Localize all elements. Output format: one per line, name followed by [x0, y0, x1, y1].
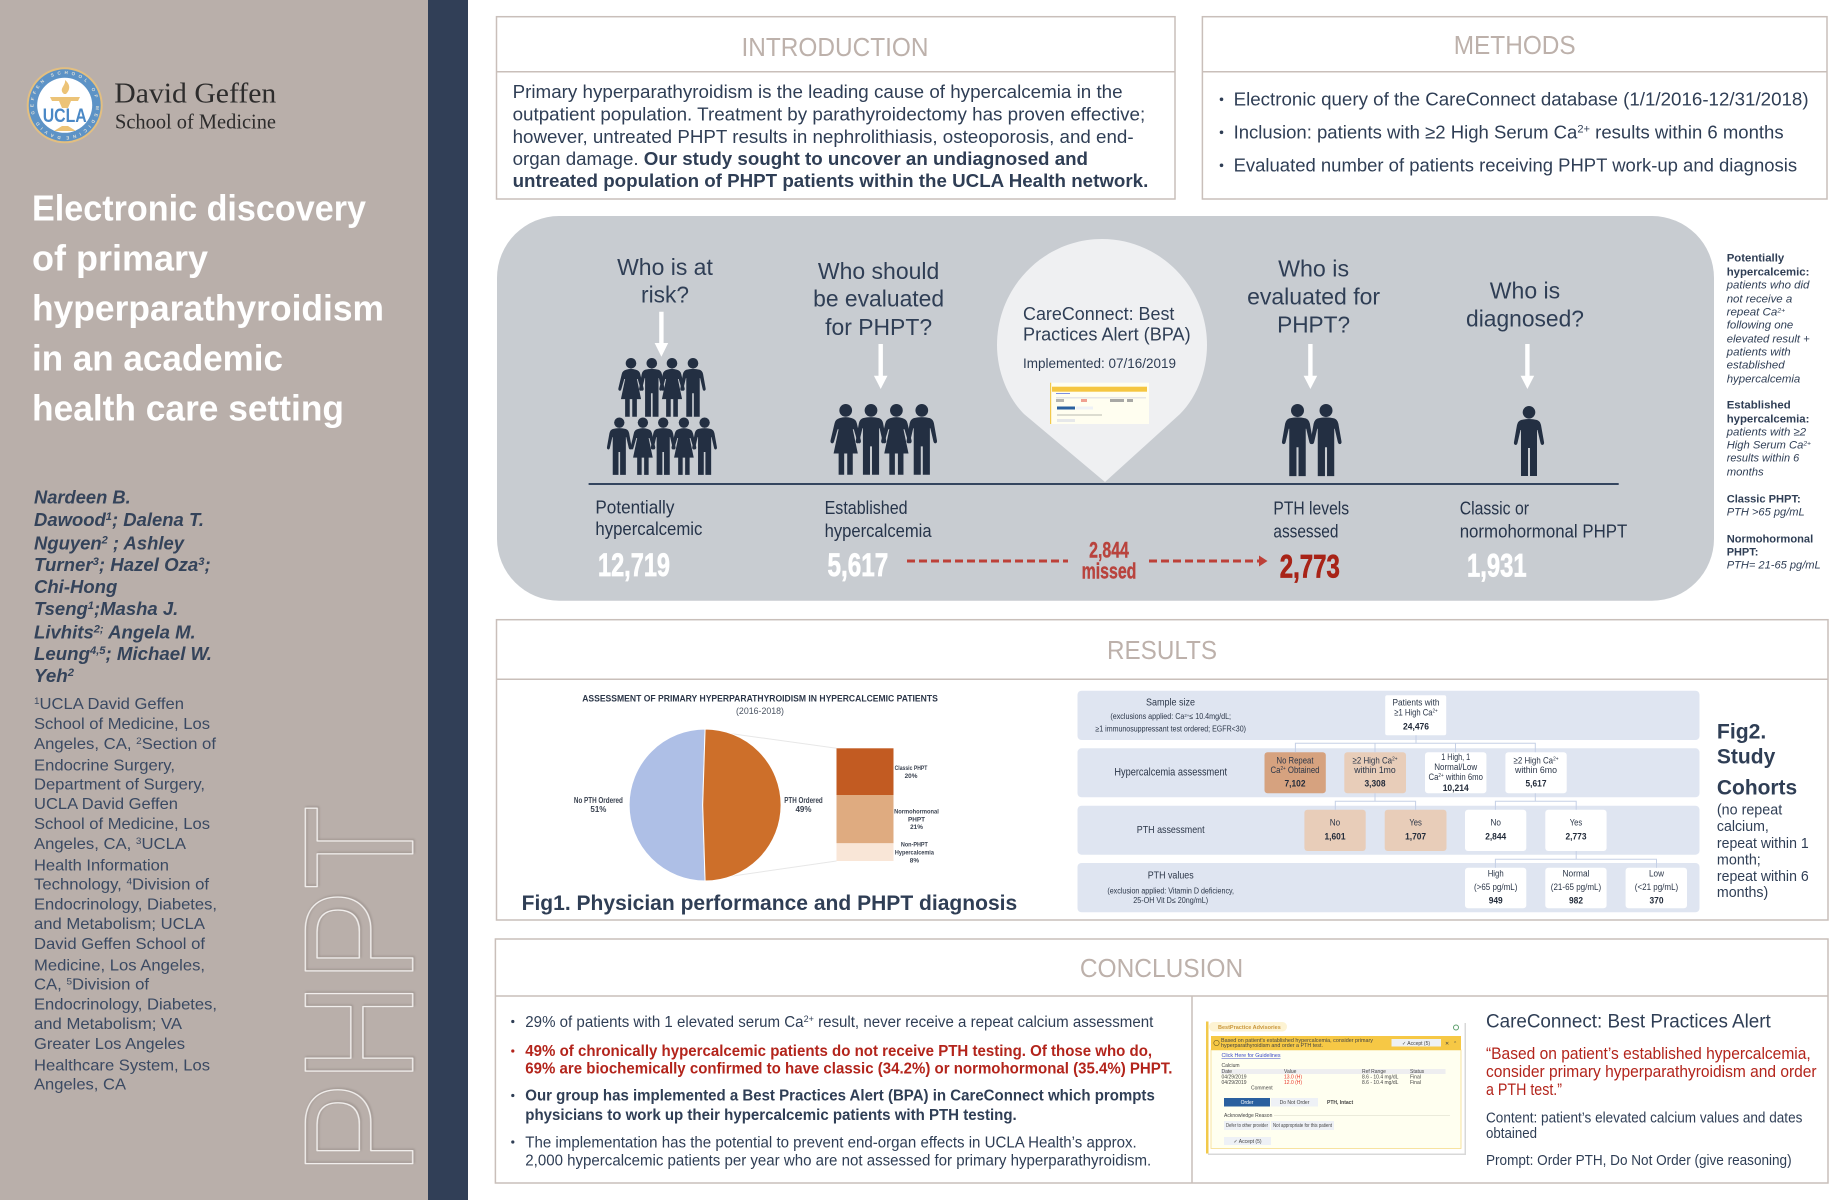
text block: definitions legend: PHPT:	[1727, 546, 1758, 558]
caption: figure 1: Fig1. Physician performance and PHPT diagnosis	[522, 892, 1017, 915]
heading: results: RESULTS	[1107, 635, 1217, 665]
title: health care setting	[32, 388, 344, 429]
text block: definitions legend: PTH= 21-65 pg/mL	[1727, 560, 1821, 572]
row: PTH assessment: No	[1490, 818, 1501, 829]
authors: Turner3; Hazel Oza 3;	[34, 555, 211, 575]
heading	[617, 254, 713, 308]
pie labels: PTH Ordered	[784, 796, 823, 805]
icon: BPA screenshot: BestPractice Advisories	[1218, 1025, 1281, 1031]
label: Established	[825, 498, 908, 518]
text block: definitions legend: hypercalcemia	[1727, 374, 1800, 386]
text block: definitions legend: following one	[1727, 320, 1793, 332]
arrow: missed patients dashed line	[907, 556, 1268, 566]
icon: BPA screenshot: Not appropriate for this patient	[1273, 1123, 1333, 1129]
row: sample size: Patients with	[1392, 698, 1440, 709]
text block: introduction body: Primary hyperparathyroidism is the leading cause of hypercalcemia in the	[513, 81, 1123, 102]
authors: Tseng1;Masha J.	[34, 599, 178, 619]
caption: figure 2: (no repeat	[1717, 802, 1783, 819]
row: sample size: Sample size	[1146, 696, 1195, 708]
pie labels: Classic PHPT	[895, 765, 927, 772]
arrow	[1304, 344, 1317, 389]
row: hypercalcemia assessment: ≥2 High Ca2+	[1514, 755, 1559, 766]
heading: be evaluated	[813, 286, 944, 312]
icon: UCLA seal: UCLA	[43, 106, 87, 127]
icon: BPA screenshot: Do Not Order	[1280, 1100, 1310, 1106]
row: PTH assessment: No	[1330, 818, 1340, 829]
row: hypercalcemia assessment: 5,617	[1526, 779, 1546, 790]
callout: CareConnect BPA pin: Practices Alert (BPA)	[1023, 325, 1191, 345]
icon: four people	[830, 404, 937, 475]
row: PTH assessment: 1,601	[1324, 832, 1346, 843]
row: PTH values: High	[1488, 869, 1504, 880]
text block: definitions legend: hypercalcemia:	[1727, 413, 1809, 425]
icon: BPA screenshot: Comment	[1251, 1086, 1273, 1092]
affiliations: Angeles, CA, 3UCLA	[34, 835, 186, 853]
row: PTH values	[1078, 863, 1700, 912]
sidebar background	[0, 0, 428, 1200]
row: hypercalcemia assessment: within 1mo	[1353, 765, 1396, 776]
pie labels: 8%	[910, 857, 919, 864]
row: sample size: (exclusions applied: Ca2+≤ 10.4mg/dL;	[1110, 712, 1231, 721]
pie labels: 49%	[795, 805, 812, 814]
authors: Livhits2; Angela M.	[34, 622, 196, 642]
text block: conclusion bullets	[511, 1014, 1173, 1169]
text block: methods bullets	[1220, 88, 1809, 175]
text block: conclusion bullets: 49% of chronically hypercalcemic patients do not receive PTH testing. Of those who do,	[525, 1043, 1152, 1060]
panel: results	[496, 620, 1828, 920]
row: hypercalcemia assessment: 10,214	[1443, 783, 1469, 794]
row: sample size: 24,476	[1403, 721, 1429, 732]
panel: patient funnel	[497, 216, 1714, 601]
text block: definitions legend: patients with ≥2	[1726, 427, 1807, 439]
heading: introduction: INTRODUCTION	[742, 32, 928, 62]
number: 12,719	[598, 547, 670, 583]
caption: figure 2: Study	[1717, 745, 1776, 768]
affiliations: Department of Surgery,	[34, 776, 205, 793]
caption: figure 2	[1717, 720, 1809, 901]
text block: CareConnect alert description: CareConnect: Best Practices Alert	[1486, 1012, 1772, 1033]
pie slice: no PTH ordered	[629, 729, 705, 881]
label: assessed	[1273, 521, 1338, 541]
row: PTH assessment: PTH assessment	[1137, 824, 1205, 836]
column: who is at risk	[595, 254, 717, 583]
icon: BPA screenshot: PTH, Intact	[1327, 1100, 1353, 1106]
text block: definitions legend: patients with	[1726, 347, 1791, 359]
row: sample size	[1078, 691, 1700, 740]
text block: definitions legend: repeat Ca2+	[1727, 306, 1785, 318]
icon: BPA screenshot: ✓ Accept (5)	[1233, 1139, 1262, 1145]
pie slice: PTH ordered	[703, 729, 781, 881]
icon: BPA screenshot: Order	[1241, 1100, 1254, 1106]
column: who is diagnosed	[1460, 277, 1627, 584]
title: of primary	[32, 238, 208, 279]
text block: definitions legend: months	[1727, 467, 1764, 479]
row: PTH assessment: 1,707	[1405, 832, 1426, 843]
text: 2,844 missed	[1082, 537, 1136, 584]
row: sample size: ≥1 immunosuppressant test ordered; EGFR<30)	[1095, 725, 1246, 734]
number: 1,931	[1467, 548, 1527, 584]
row: hypercalcemia assessment	[1078, 748, 1700, 797]
affiliations: School of Medicine, Los	[34, 816, 210, 833]
icon: BPA screenshot: hyperparathyroidism and order a PTH test.	[1221, 1043, 1323, 1049]
title: Electronic discovery	[32, 188, 366, 229]
logo wordmark: David Geffen	[114, 78, 277, 110]
authors: Leung4,5; Michael W.	[34, 644, 212, 664]
row: PTH values: PTH values	[1148, 870, 1194, 882]
chart title	[582, 694, 938, 717]
row: hypercalcemia assessment: No Repeat	[1276, 755, 1314, 766]
title	[32, 188, 384, 429]
heading	[1247, 256, 1380, 338]
label	[595, 497, 702, 539]
icon: BPA screenshot: Acknowledge Reason	[1224, 1113, 1273, 1119]
text block: CareConnect alert description	[1486, 1012, 1817, 1169]
heading: PHPT?	[1277, 312, 1350, 338]
heading: Who is	[1278, 256, 1349, 282]
row: PTH assessment: Yes	[1570, 818, 1582, 829]
icon: BPA screenshot: Defer to other provider	[1226, 1123, 1268, 1129]
text block: introduction body: outpatient population. Treatment by parathyroidectomy has proven effective;	[513, 104, 1145, 124]
icon: BPA screenshot: Final	[1410, 1074, 1421, 1080]
row: PTH values: 982	[1569, 896, 1583, 907]
text block: CareConnect alert description: Content: patient’s elevated calcium values and dates	[1486, 1110, 1802, 1126]
pie labels: Non-PHPT	[901, 842, 928, 849]
panel: methods	[1202, 17, 1827, 199]
number: 5,617	[828, 547, 888, 583]
affiliations: Health Information	[34, 858, 169, 875]
text block: methods bullets: Electronic query of the CareConnect database (1/1/2016-12/31/2018)	[1234, 88, 1809, 109]
affiliations: and Metabolism; UCLA	[34, 916, 205, 933]
authors: Yeh2	[34, 666, 74, 686]
row: PTH values: 370	[1650, 896, 1664, 907]
row: hypercalcemia assessment: Ca2+ Obtained	[1270, 765, 1320, 776]
column: who is evaluated	[1247, 256, 1380, 585]
text block: CareConnect alert description: “Based on patient’s established hypercalcemia,	[1486, 1044, 1811, 1063]
stacked bar: PTH ordered breakdown	[836, 748, 894, 861]
caption: figure 2: month;	[1717, 851, 1761, 868]
text block: definitions legend: established	[1727, 360, 1785, 372]
caption: figure 2: repeat within 6	[1717, 868, 1809, 885]
icon: BPA screenshot: 04/29/2019	[1222, 1074, 1247, 1080]
row: PTH values: (>65 pg/mL)	[1474, 882, 1517, 893]
title: in an academic	[32, 338, 283, 379]
caption: figure 2: Cohorts	[1717, 776, 1797, 799]
text block: conclusion bullets: 2,000 hypercalcemic patients per year who are not assessed for primary hyperparathyroidism.	[525, 1152, 1151, 1169]
heading	[813, 258, 944, 340]
label	[1460, 498, 1627, 541]
heading: methods: METHODS	[1454, 30, 1576, 60]
arrow	[1521, 344, 1534, 389]
icon: BPA screenshot: Status	[1410, 1069, 1425, 1075]
affiliations: Angeles, CA, 2Section of	[34, 735, 217, 753]
icon: BPA screenshot: Click Here for Guidelines	[1222, 1053, 1281, 1059]
row: hypercalcemia assessment: 3,308	[1364, 779, 1386, 790]
title: hyperparathyroidism	[32, 288, 384, 329]
pie labels: No PTH Ordered	[574, 796, 623, 805]
navy stripe	[428, 0, 468, 1200]
arrow	[874, 344, 888, 389]
icon: BPA screenshot: ✕	[1445, 1041, 1449, 1047]
label	[1273, 498, 1349, 541]
text block: definitions legend	[1726, 253, 1821, 572]
icon: two people	[1282, 404, 1342, 476]
authors: Nardeen B.	[34, 487, 131, 507]
row: PTH assessment	[1078, 806, 1700, 855]
pie labels	[574, 765, 939, 864]
row: hypercalcemia assessment: Hypercalcemia assessment	[1114, 767, 1227, 779]
authors: Nguyen2 ; Ashley	[34, 534, 185, 554]
pie labels: Hypercalcemia	[895, 849, 934, 856]
text block: methods bullets: Inclusion: patients with ≥2 High Serum Ca2+ results within 6 months	[1234, 121, 1784, 142]
callout: CareConnect BPA pin: Implemented: 07/16/2019	[1023, 355, 1176, 371]
text block: conclusion bullets: 69% are biochemically confirmed to have classic (34.2%) or normohormonal (35.4%) PHPT.	[525, 1060, 1172, 1077]
text block: conclusion bullets: physicians to work up their hypercalcemic patients with PTH testing.	[525, 1107, 1017, 1124]
text block: introduction body	[513, 81, 1148, 191]
caption: figure 2: Fig2.	[1717, 720, 1766, 743]
logo wordmark: School of Medicine	[115, 109, 276, 133]
panel: conclusion	[495, 939, 1828, 1183]
icon: BPA screenshot: Calcium	[1222, 1063, 1240, 1069]
number: 2,773	[1280, 549, 1340, 585]
text block: definitions legend: Classic PHPT:	[1727, 493, 1801, 505]
icon: BPA screenshot: Date	[1222, 1069, 1232, 1075]
icon: BPA screenshot: ✓ Accept (5)	[1402, 1041, 1430, 1047]
label	[825, 498, 933, 541]
chart: study cohort flow	[1078, 691, 1700, 912]
chart title: ASSESSMENT OF PRIMARY HYPERPARATHYROIDISM IN HYPERCALCEMIC PATIENTS	[582, 694, 938, 705]
row: PTH values: Normal	[1562, 869, 1590, 880]
icon: BPA screenshot: 12.0 (H)	[1284, 1080, 1302, 1086]
affiliations: David Geffen School of	[34, 936, 206, 953]
icon: BPA screenshot: ⌃	[1453, 1041, 1457, 1047]
text block: definitions legend: results within 6	[1727, 453, 1800, 465]
logo wordmark	[114, 78, 277, 133]
panel: introduction	[496, 17, 1175, 199]
text block: introduction body: however, untreated PHPT results in nephrolithiasis, osteoporosis, and end-	[513, 126, 1134, 147]
text block: CareConnect alert description: a PTH test.”	[1486, 1080, 1562, 1099]
label: normohormonal PHPT	[1460, 521, 1627, 541]
affiliations: Angeles, CA	[34, 1076, 126, 1094]
affiliations: Endocrinology, Diabetes,	[34, 896, 217, 913]
row: hypercalcemia assessment: within 6mo	[1514, 765, 1557, 776]
affiliations: School of Medicine, Los	[34, 716, 210, 733]
icon: BPA screenshot: 13.0 (H)	[1284, 1074, 1302, 1080]
heading: risk?	[641, 282, 689, 308]
row: PTH assessment: Yes	[1409, 818, 1422, 829]
text block: conclusion bullets: Our group has implemented a Best Practices Alert (BPA) in CareConnect which prompts	[525, 1088, 1155, 1105]
pie labels: Normohormonal	[894, 808, 939, 815]
pie labels: 20%	[905, 773, 918, 780]
row: PTH values: 25-OH Vit D≤ 20ng/mL)	[1133, 896, 1208, 905]
heading: diagnosed?	[1466, 306, 1584, 332]
text block: definitions legend: Potentially	[1727, 253, 1785, 265]
text block: introduction body: organ damage. Our study sought to uncover an undiagnosed and	[513, 148, 1088, 169]
text block: definitions legend: elevated result +	[1727, 333, 1810, 345]
icon: BPA screenshot: 04/29/2019	[1222, 1080, 1247, 1086]
chart: pie of pie, PTH assessment	[574, 694, 939, 881]
column: who should be evaluated	[813, 258, 944, 583]
affiliations: CA, 5Division of	[34, 976, 150, 994]
affiliations	[34, 696, 217, 1094]
icon: BPA screenshot	[1206, 1022, 1466, 1155]
text block: definitions legend: hypercalcemic:	[1727, 267, 1809, 279]
icon: one person	[1514, 406, 1544, 476]
label: hypercalcemia	[825, 521, 933, 541]
row: PTH assessment: 2,844	[1485, 832, 1507, 843]
authors: Dawood1; Dalena T.	[34, 510, 204, 530]
logo: UCLA David Geffen School of Medicine	[26, 67, 277, 144]
heading: evaluated for	[1247, 283, 1380, 309]
callout: CareConnect BPA pin: CareConnect: Best	[1023, 304, 1174, 324]
arrow	[655, 312, 668, 357]
affiliations: Endocrinology, Diabetes,	[34, 996, 217, 1013]
authors	[34, 487, 212, 686]
icon: crowd of people	[607, 358, 717, 475]
chart title: (2016-2018)	[736, 706, 784, 717]
label: Potentially	[595, 497, 674, 517]
text block: introduction body: untreated population of PHPT patients within the UCLA Health network.	[513, 170, 1148, 191]
text block: definitions legend: Established	[1727, 399, 1791, 411]
pie labels: PHPT	[908, 816, 925, 823]
icon: BPA screenshot: Based on patient's established hypercalcemia, consider primary	[1221, 1038, 1374, 1044]
affiliations: Endocrine Surgery,	[34, 758, 175, 774]
caption: figure 2: months)	[1717, 884, 1768, 901]
text block: conclusion bullets: The implementation has the potential to prevent end-organ effects in UCLA Health’s approx.	[525, 1134, 1137, 1151]
heading: for PHPT?	[825, 314, 932, 340]
row: hypercalcemia assessment: 7,102	[1284, 779, 1306, 790]
icon: BPA screenshot: Final	[1410, 1080, 1421, 1086]
text block: definitions legend: not receive a	[1727, 294, 1792, 306]
text block: definitions legend: Normohormonal	[1727, 534, 1813, 546]
row: PTH values: (21-65 pg/mL)	[1551, 882, 1601, 893]
label: hypercalcemic	[595, 519, 702, 539]
row: sample size: ≥1 High Ca2+	[1394, 708, 1438, 719]
caption: figure 2: calcium,	[1717, 818, 1769, 835]
row: PTH assessment: 2,773	[1566, 832, 1586, 843]
icon: BPA screenshot: Value	[1284, 1069, 1297, 1075]
heading: Who should	[818, 258, 939, 284]
row: hypercalcemia assessment: ≥2 High Ca2+	[1352, 755, 1398, 766]
affiliations: 1UCLA David Geffen	[34, 696, 184, 713]
text block: methods bullets: Evaluated number of patients receiving PHPT work-up and diagnosis	[1234, 154, 1797, 175]
row: hypercalcemia assessment: Ca2+ within 6mo	[1428, 772, 1483, 783]
text block: definitions legend: High Serum Ca2+	[1727, 440, 1811, 452]
text: 2,844 missed: missed	[1082, 559, 1136, 584]
text block: conclusion bullets: 29% of patients with 1 elevated serum Ca2+ result, never receive a repeat calcium assessment	[525, 1014, 1154, 1031]
affiliations: Healthcare System, Los	[34, 1058, 210, 1075]
heading	[1466, 277, 1584, 332]
heading: conclusion: CONCLUSION	[1080, 953, 1243, 983]
row: PTH values: 949	[1489, 896, 1503, 907]
text block: CareConnect alert description: obtained	[1486, 1126, 1537, 1142]
text block: definitions legend: patients who did	[1726, 280, 1810, 292]
row: PTH values: (<21 pg/mL)	[1635, 882, 1678, 893]
text block: CareConnect alert description: consider primary hyperparathyroidism and order	[1486, 1062, 1817, 1081]
authors: Chi-Hong	[34, 577, 117, 597]
icon: mini BPA screenshot	[1050, 383, 1149, 424]
caption: figure 2: repeat within 1	[1717, 835, 1809, 852]
row: hypercalcemia assessment: 1 High, 1	[1441, 752, 1470, 763]
text block: definitions legend: PTH >65 pg/mL	[1727, 506, 1805, 518]
rotated outlined PHPT wordmark: PHPT	[273, 805, 447, 1175]
affiliations: and Metabolism; VA	[34, 1016, 182, 1033]
row: PTH values: (exclusion applied: Vitamin D deficiency,	[1107, 886, 1234, 895]
row: hypercalcemia assessment: Normal/Low	[1434, 762, 1477, 773]
callout: CareConnect BPA pin	[997, 239, 1207, 482]
icon: BPA screenshot: 8.6 - 10.4 mg/dL	[1362, 1080, 1399, 1086]
affiliations: Technology, 4Division of	[34, 876, 210, 893]
icon: UCLA seal: DAVID GEFFEN SCHOOL OF MEDICINE	[30, 70, 100, 140]
icon: BPA screenshot: Ref Range	[1362, 1069, 1386, 1075]
pie labels: 21%	[910, 824, 923, 831]
heading: Who is at	[617, 254, 713, 280]
label: PTH levels	[1273, 498, 1349, 518]
row: PTH values: Low	[1649, 869, 1664, 880]
affiliations: Greater Los Angeles	[34, 1036, 185, 1053]
pie labels: 51%	[590, 805, 606, 814]
text: 2,844 missed: 2,844	[1089, 537, 1129, 562]
affiliations: Medicine, Los Angeles,	[34, 958, 205, 975]
affiliations: UCLA David Geffen	[34, 796, 178, 813]
icon: BPA screenshot: 8.6 - 10.4 mg/dL	[1362, 1074, 1399, 1080]
text block: CareConnect alert description: Prompt: Order PTH, Do Not Order (give reasoning)	[1486, 1153, 1792, 1169]
heading: Who is	[1490, 277, 1560, 303]
label: Classic or	[1460, 498, 1529, 518]
